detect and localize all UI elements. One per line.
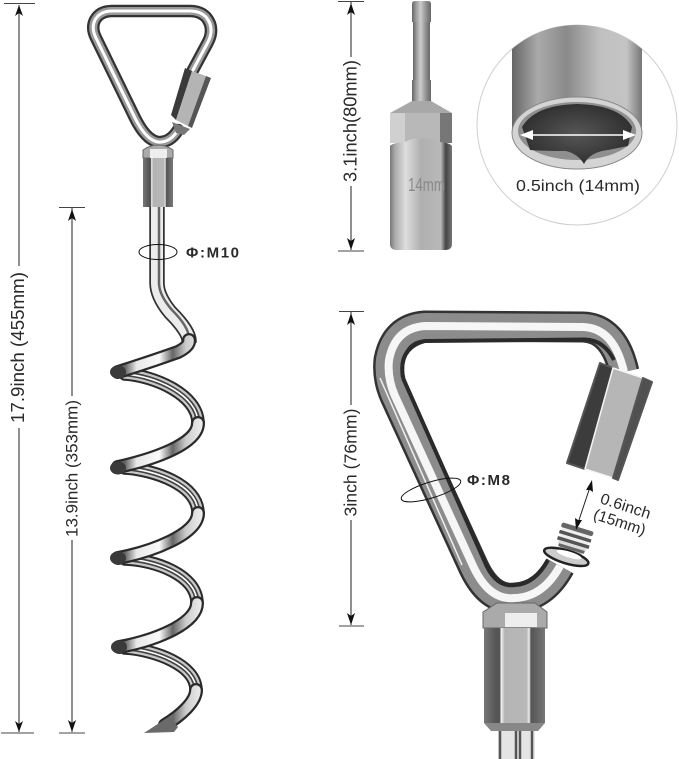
ring diameter marker [399,472,510,507]
stake shaft and spiral [110,207,198,733]
hex connector on stake [143,145,173,207]
stake tip [144,716,178,733]
socket width label: 0.5inch (14mm) [516,178,640,195]
dimension: coil length 13.9inch [59,208,85,733]
small locking nut [171,68,211,135]
spiral rear segments [125,374,198,690]
large locking nut, open [567,363,652,480]
large carabiner ring [380,326,624,598]
small carabiner ring [93,11,211,142]
dimension: ring height 3inch [339,312,364,626]
dimension: ring height 3inch: 3inch (76mm) [340,408,360,516]
shaft diameter marker [139,244,239,262]
socket cylinder [512,20,642,169]
dimension: coil length 13.9inch: 13.9inch (353mm) [62,400,82,537]
gap dimension arrow: 0.6inch [598,491,653,523]
large hex connector [483,603,547,759]
dimension: socket length 3.1inch: 3.1inch(80mm) [340,60,360,182]
ring diameter marker: Φ:M8 [467,472,510,489]
dimension: overall length 17.9inch: 17.9inch (455mm) [7,272,28,423]
socket drill bit [390,1,452,250]
spiral front segments [110,340,198,725]
dimension: socket length 3.1inch [338,2,364,251]
gap dimension arrow: (15mm) [591,506,648,539]
circle detail: socket opening [477,20,677,225]
shaft diameter marker: Φ:M10 [186,244,239,262]
threaded stud [542,520,598,570]
gap dimension arrow [575,480,653,539]
socket size engraving: 14mm [408,175,445,195]
dimension: overall length 17.9inch [1,4,35,733]
white width arrow [520,130,636,140]
upper shaft [157,207,189,342]
